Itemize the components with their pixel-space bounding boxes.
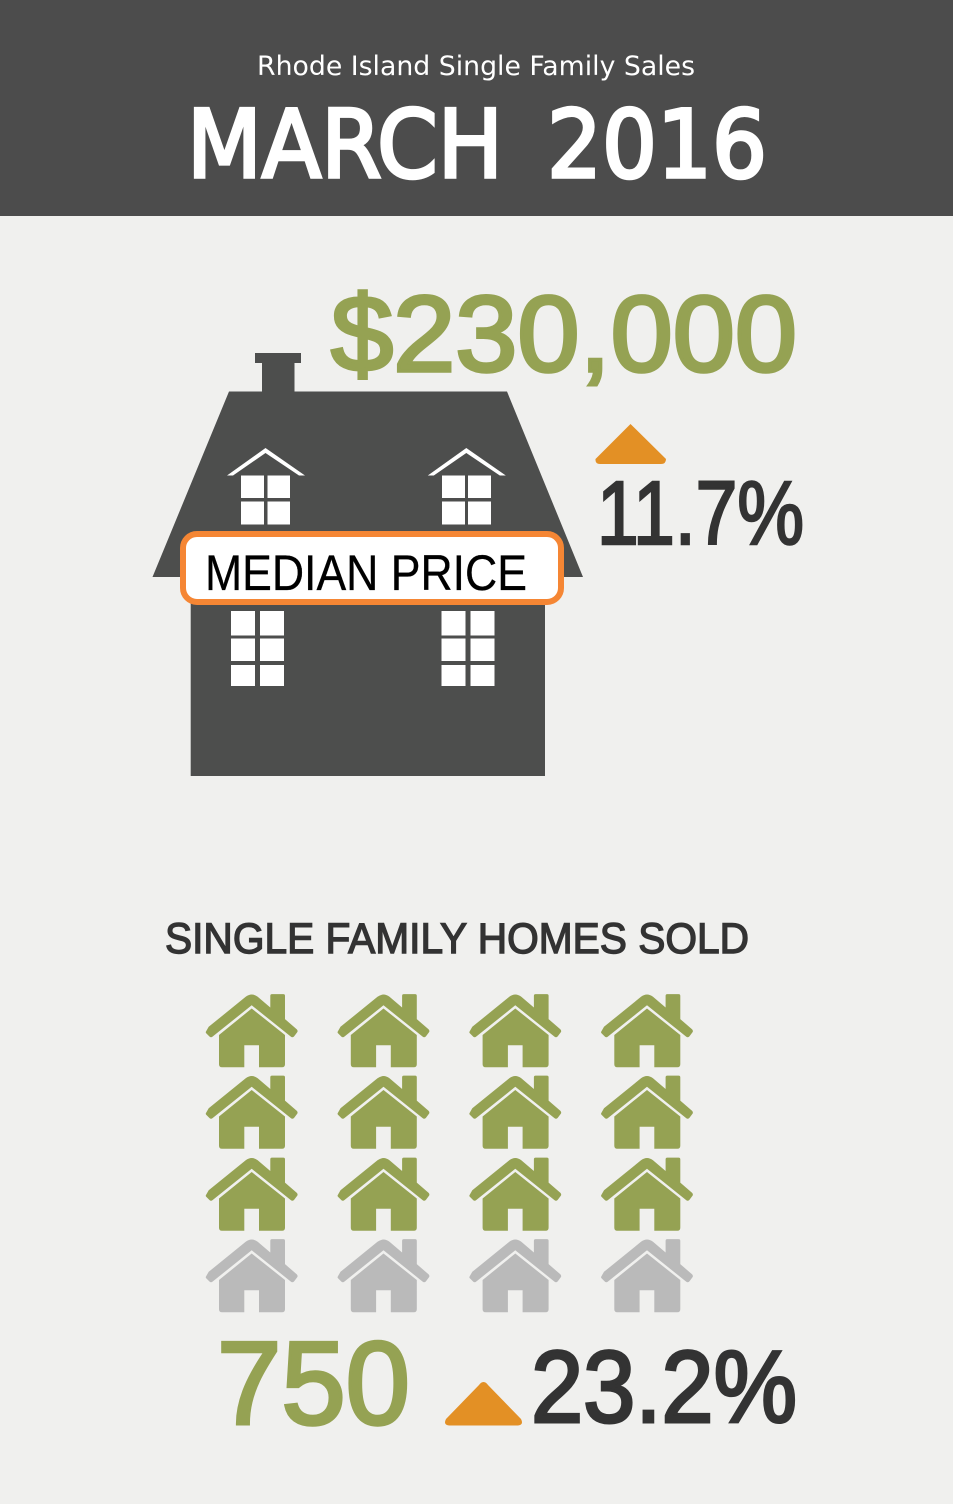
icon: up arrow bbox=[445, 1382, 522, 1426]
median price banner: MEDIAN PRICE bbox=[205, 545, 527, 601]
house pictogram grid bbox=[206, 994, 693, 1312]
icon: large house bbox=[152, 353, 583, 776]
dormer windows bbox=[227, 448, 506, 524]
median price figure: $230,000 bbox=[331, 273, 797, 394]
price change: 11.7% bbox=[597, 464, 804, 564]
homes sold change: 23.2% bbox=[531, 1330, 797, 1444]
lower windows bbox=[231, 611, 494, 686]
section heading: SINGLE FAMILY HOMES SOLD bbox=[165, 915, 749, 963]
subtitle: Rhode Island Single Family Sales bbox=[257, 51, 695, 82]
icon: up arrow bbox=[595, 424, 666, 464]
title: 2016 bbox=[547, 91, 767, 200]
homes sold count: 750 bbox=[217, 1318, 410, 1450]
title: MARCH bbox=[187, 91, 503, 200]
header band bbox=[0, 0, 953, 216]
